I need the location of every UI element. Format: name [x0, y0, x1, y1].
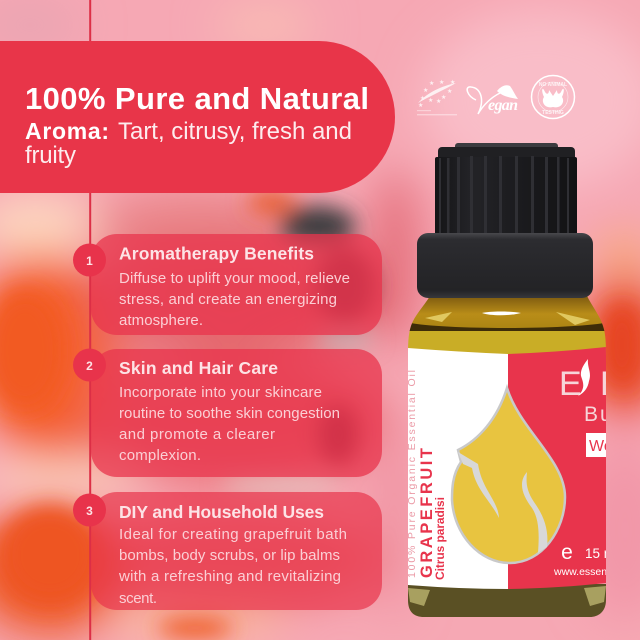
number badge 2	[73, 348, 106, 382]
icon: no animal testing badge: TESTING	[542, 110, 564, 116]
icon: EU organic leaf: ★	[418, 102, 423, 109]
label brand text: www.essential	[553, 566, 621, 578]
card 2 text: complexion.	[119, 447, 201, 464]
card 3 text: with a refreshing and revitalizing	[118, 568, 341, 585]
label brand text: 15 ml	[585, 546, 618, 561]
label left vertical text: GRAPEFRUIT	[418, 448, 436, 578]
card 2 text: Skin and Hair Care	[119, 358, 278, 378]
icon: vegan logo: egan	[488, 97, 518, 114]
label: white side	[408, 348, 508, 589]
card 2 text	[119, 358, 340, 464]
card 2: skin and hair care	[73, 348, 382, 477]
icon: EU organic leaf: ★	[420, 95, 425, 102]
dropper cap	[417, 143, 593, 298]
card 1 text: Aromatherapy Benefits	[119, 244, 314, 264]
oil drop	[452, 388, 565, 563]
label left vertical text	[406, 370, 447, 580]
aroma text: fruity	[25, 142, 76, 169]
number badge 3	[73, 494, 106, 526]
number badge 1	[73, 244, 106, 276]
icon: EU organic leaf: ★	[447, 88, 452, 95]
aroma text: Aroma:	[25, 118, 109, 144]
label brand text: Bu	[584, 403, 614, 426]
panel: header	[0, 41, 395, 193]
number badge 3: 3	[86, 504, 93, 518]
label: red side	[508, 347, 606, 589]
card 1 text: stress, and create an energizing	[119, 291, 337, 308]
label brand text: E	[600, 365, 623, 403]
bottle glass	[405, 296, 623, 619]
card 2 text: Incorporate into your skincare	[119, 384, 322, 401]
card 3 text	[118, 502, 347, 607]
icon: EU organic leaf: ★	[429, 80, 434, 87]
card 1 text	[119, 244, 350, 329]
card 3 text: DIY and Household Uses	[119, 502, 324, 522]
heading: 100% Pure and Natural	[25, 81, 369, 116]
number badge 1: 1	[86, 254, 93, 268]
icon: EU organic leaf: ★	[441, 94, 446, 101]
card 1: aromatherapy benefits	[73, 234, 382, 335]
card 3 text: bombs, body scrubs, or lip balms	[119, 547, 340, 564]
icon: EU organic leaf: ★	[436, 98, 441, 105]
aroma text: Tart, citrusy, fresh and	[118, 118, 352, 145]
card 1 text: atmosphere.	[119, 312, 203, 329]
icon: EU organic leaf: ★	[439, 79, 444, 86]
card 3: DIY and household uses	[73, 492, 382, 610]
icon: EU organic leaf: ★	[450, 79, 455, 86]
label left vertical text: Citrus paradisi	[433, 497, 447, 580]
icon: EU organic leaf: ★	[428, 97, 433, 104]
product: essential oil bottle	[405, 143, 623, 619]
card 1 text: Diffuse to uplift your mood, relieve	[119, 270, 350, 287]
timeline line	[89, 0, 91, 640]
card 2 text: and promote a clearer	[119, 426, 275, 443]
label left vertical text: 100% Pure Organic Essential Oil	[406, 370, 418, 578]
card 3 text: Ideal for creating grapefruit bath	[119, 526, 347, 543]
card 2 text: routine to soothe skin congestion	[119, 405, 340, 422]
icon: EU organic leaf	[417, 79, 457, 115]
label brand text	[554, 359, 606, 575]
icon: EU organic leaf: ★	[423, 87, 428, 94]
icon: no animal testing badge	[532, 76, 574, 118]
icon: vegan logo	[467, 85, 518, 114]
card 3 text: scent.	[119, 590, 157, 607]
label brand text: Wo	[589, 438, 613, 455]
label brand text: e	[561, 541, 573, 564]
label brand text: E	[559, 365, 582, 403]
aroma text	[25, 118, 352, 169]
number badge 2: 2	[86, 359, 93, 373]
icon: no animal testing badge: NO ANIMAL	[539, 82, 567, 88]
